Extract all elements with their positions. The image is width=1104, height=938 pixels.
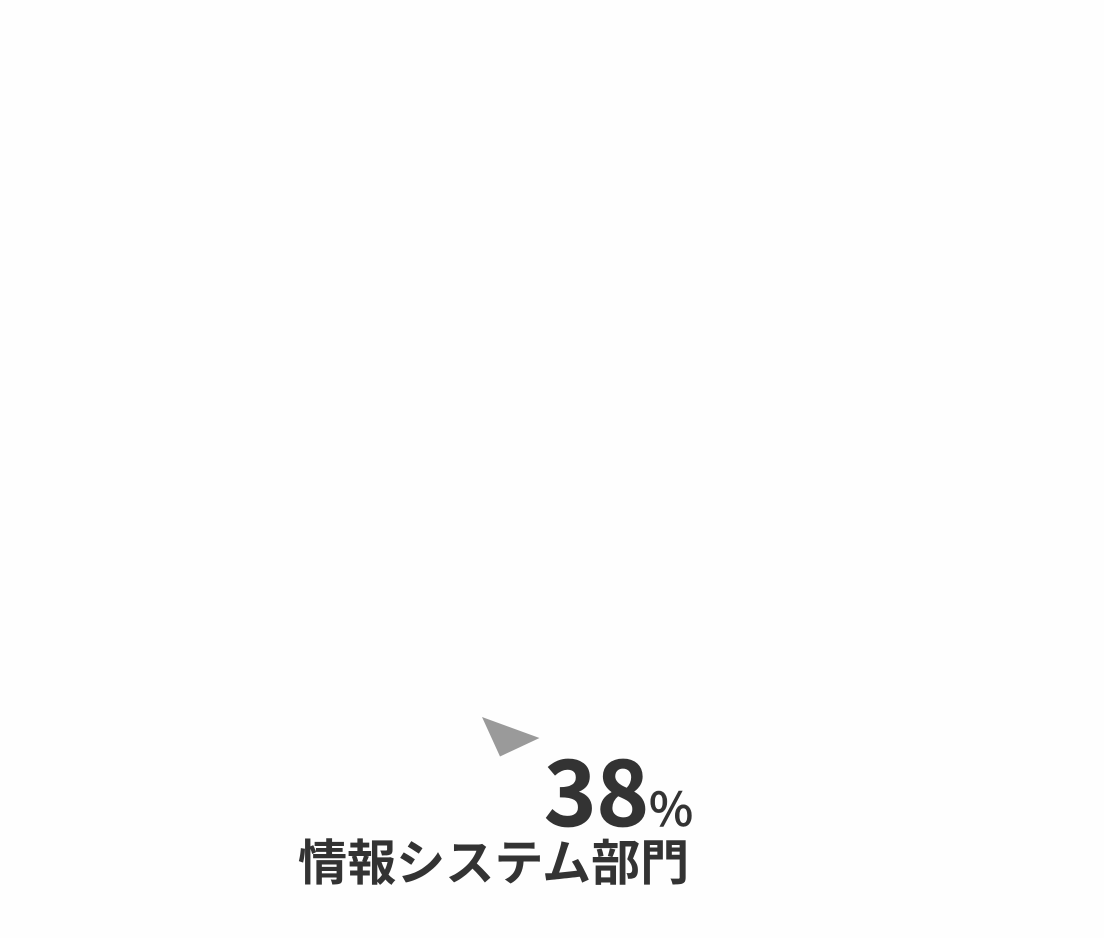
icon: pointer triangle (482, 717, 540, 756)
unit: percent: % (649, 771, 693, 840)
value: 38: 38 (544, 723, 649, 852)
label: information systems department: 情報システム部門 (298, 824, 689, 895)
